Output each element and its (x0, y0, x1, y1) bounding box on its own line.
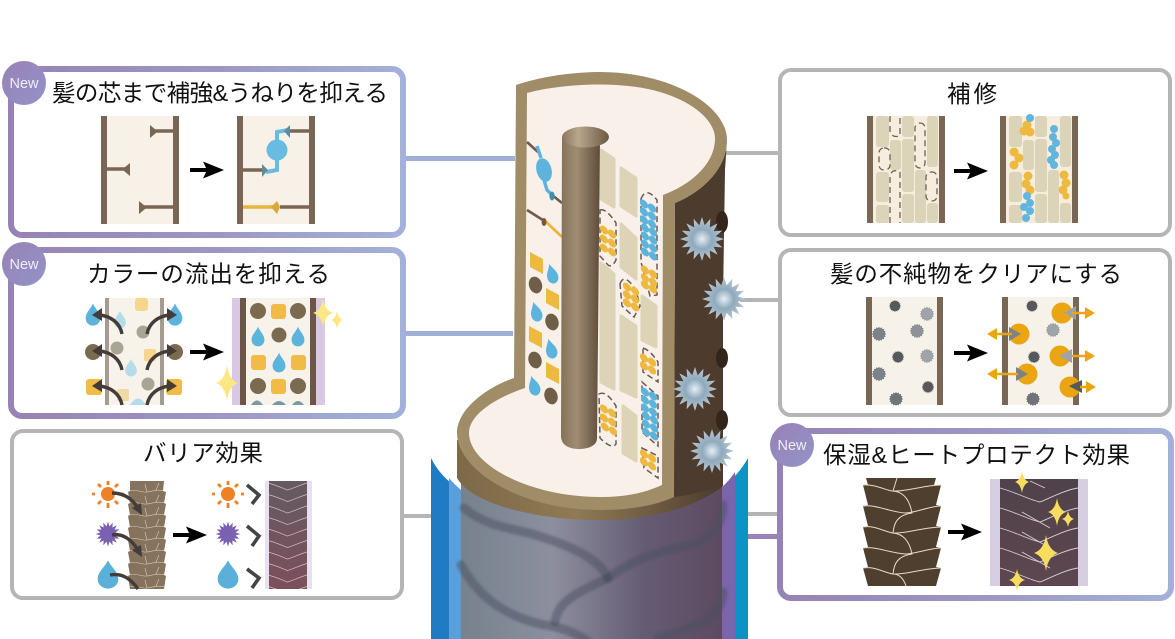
panel: repair (780, 70, 1170, 235)
cuticle straps on cylinder (461, 505, 723, 639)
before diagram: impurities in hair (866, 297, 943, 406)
after diagram: filled cells (1000, 114, 1078, 223)
arrow (190, 344, 224, 360)
arrow (190, 162, 224, 178)
after diagram: smooth glossy cuticle (990, 471, 1088, 591)
title: 保湿&ヒートプロテクト効果 (823, 442, 1130, 468)
tan cuticle wall (457, 72, 727, 510)
left wall molecules (527, 142, 562, 237)
after diagram: impurities removed (987, 297, 1096, 406)
damaged spots repaired (599, 193, 658, 478)
after diagram: rebuilt bonds (237, 116, 315, 224)
badge: New (770, 423, 814, 467)
before diagram: broken bonds (101, 116, 179, 224)
arrow (948, 524, 982, 540)
connector lines (402, 151, 780, 539)
title: 髪の不純物をクリアにする (830, 261, 1122, 287)
panel: suppress color outflow (2, 242, 403, 416)
before diagram: damaged cells (867, 116, 945, 223)
after diagram: retained pigments (216, 298, 343, 405)
badge: New: New (777, 438, 807, 454)
title: バリア効果 (143, 440, 263, 466)
hair body cylinder (461, 480, 722, 639)
before diagram: damage penetrating cuticle (92, 481, 166, 589)
panel: barrier effect (12, 431, 402, 598)
yellow and blue repair clusters (598, 198, 660, 472)
left wall pigments (526, 252, 561, 406)
panel: moisture and heat protect (770, 423, 1171, 598)
arrow (173, 526, 207, 544)
brown rim under cross-section (457, 440, 723, 520)
cortex cells (601, 150, 656, 461)
arrow (954, 344, 988, 362)
arrow (954, 162, 988, 180)
after diagram: damage deflected (212, 481, 312, 589)
panel: reinforcement to core and wave control (2, 61, 403, 235)
central medulla core (561, 126, 609, 449)
title: カラーの流出を抑える (87, 261, 330, 287)
badge: New: New (9, 76, 39, 92)
cream cortex interior (469, 85, 715, 497)
badge: New (2, 242, 46, 286)
title: 補修 (947, 81, 998, 107)
blue background stripes (431, 458, 748, 639)
spiky impurities (673, 217, 746, 473)
badge: New: New (9, 257, 39, 273)
badge: New (2, 61, 46, 105)
central hair cross-section illustration (431, 72, 748, 639)
before diagram: leaking pigments (85, 298, 183, 405)
before diagram: rough dark cuticle (863, 478, 941, 586)
title: 髪の芯まで補強&うねりを抑える (52, 80, 388, 106)
dark outer cuticle side (674, 140, 728, 497)
panel: clear impurities (780, 250, 1170, 415)
